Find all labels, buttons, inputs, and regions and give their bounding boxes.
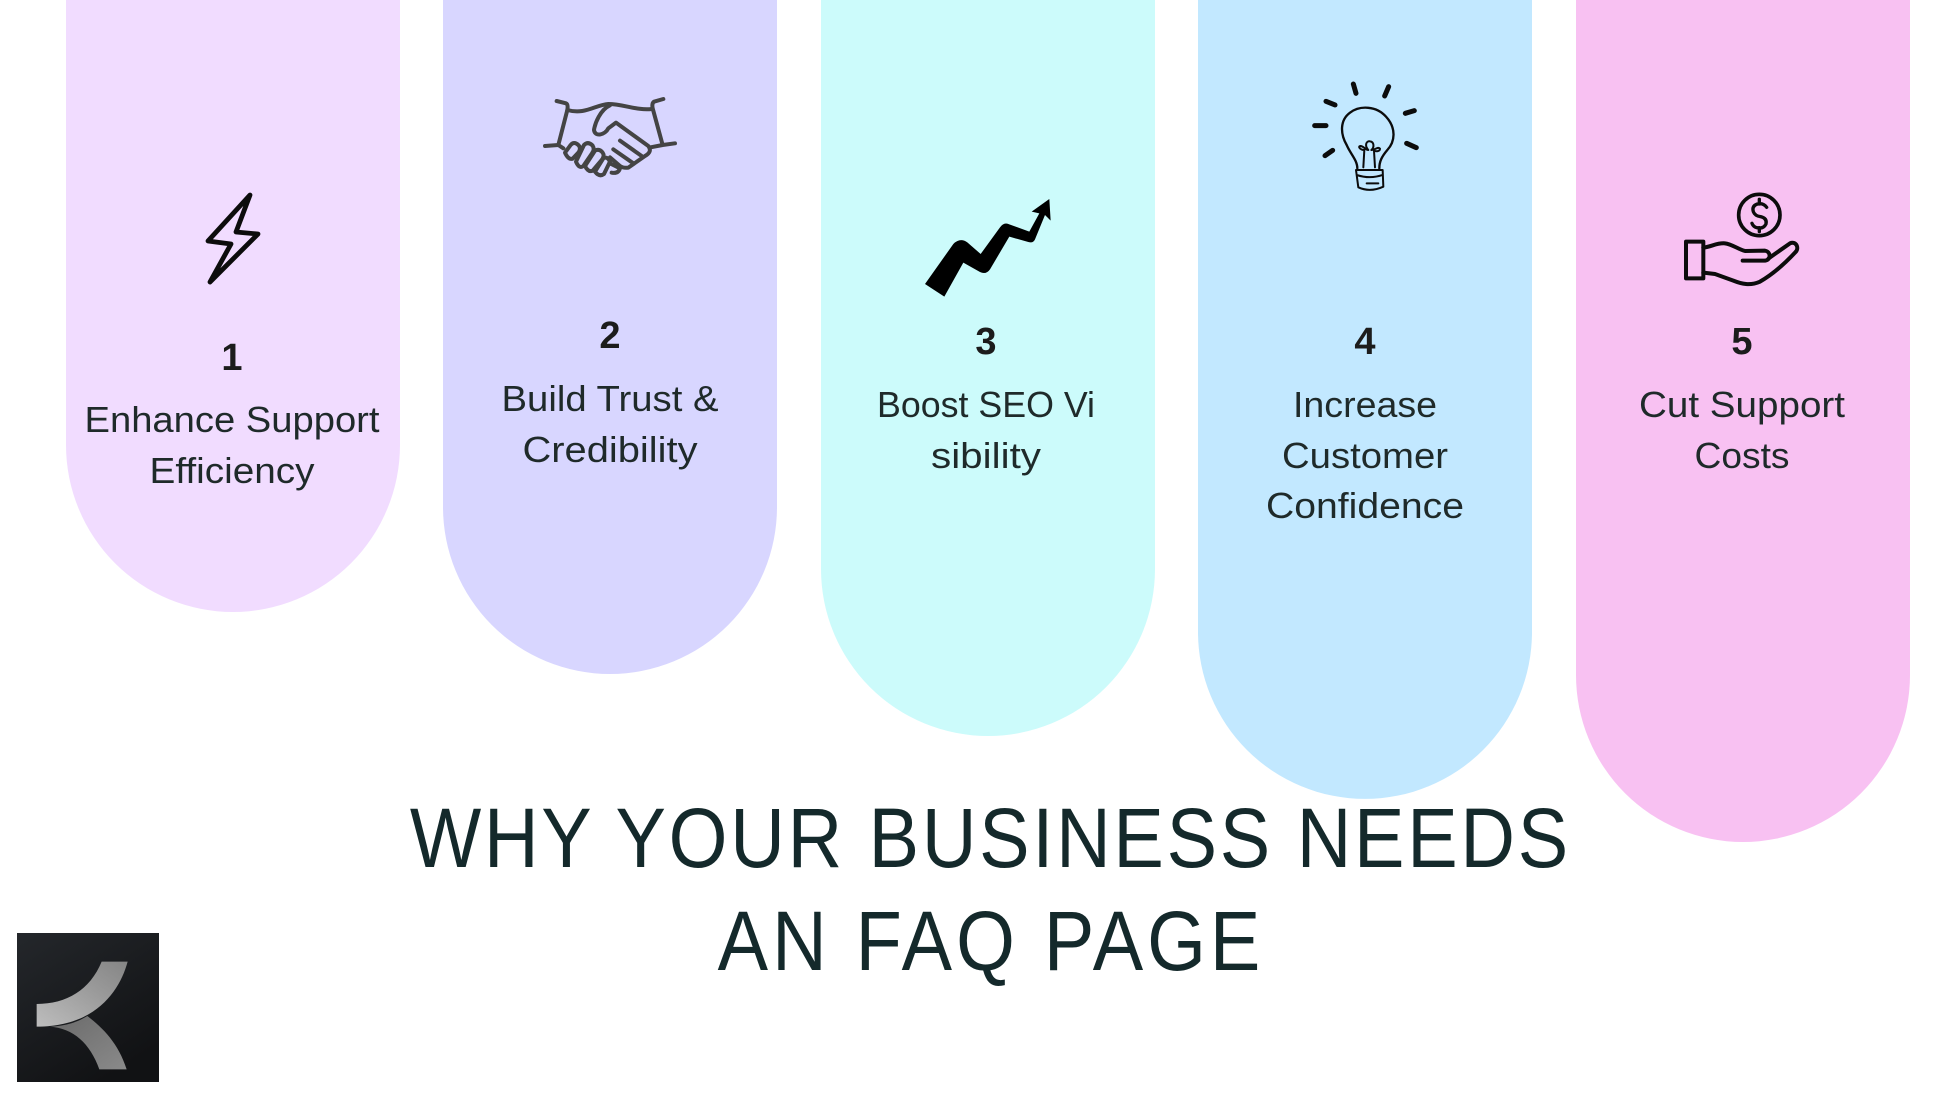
label: Cut Support Costs: Cut Support (1639, 384, 1845, 425)
panel: step 4 Increase Customer Confidence (1198, 0, 1532, 799)
label: Boost SEO Visibility: Boost SEO Vi (877, 384, 1095, 425)
label: Build Trust & Credibility: Build Trust & (502, 378, 718, 419)
panel: step 1 Enhance Support Efficiency (66, 0, 400, 612)
logo (17, 933, 159, 1082)
label: Increase Customer Confidence: Increase (1293, 384, 1437, 425)
panel: step 2 Build Trust & Credibility (443, 0, 777, 674)
title (410, 791, 1568, 988)
label: Cut Support Costs: Costs (1694, 435, 1790, 476)
number 1: 1 (221, 337, 243, 379)
label: Enhance Support Efficiency (84, 399, 380, 491)
label: Cut Support Costs (1639, 384, 1845, 476)
icon: handshake (545, 99, 675, 175)
label: Increase Customer Confidence (1266, 384, 1464, 526)
label: Increase Customer Confidence: Customer (1282, 435, 1448, 476)
icon: light bulb (1315, 84, 1416, 190)
number 3: 3 (975, 321, 997, 363)
icon: hand with coin (1686, 194, 1797, 284)
label: Boost SEO Visibility (877, 384, 1095, 476)
panel: step 3 Boost SEO Visibility (821, 0, 1155, 736)
label: Increase Customer Confidence: Confidence (1266, 485, 1464, 526)
panel: step 5 Cut Support Costs (1576, 0, 1910, 842)
title: AN FAQ PAGE (718, 894, 1260, 988)
label: Build Trust & Credibility (502, 378, 718, 470)
icon: rising arrow (925, 199, 1051, 297)
label: Boost SEO Visibility: sibility (931, 435, 1041, 476)
number 2: 2 (599, 315, 621, 357)
number 4: 4 (1354, 321, 1376, 363)
number 5: 5 (1731, 321, 1753, 363)
title: WHY YOUR BUSINESS NEEDS (410, 791, 1568, 885)
label: Build Trust & Credibility: Credibility (522, 429, 698, 470)
label: Enhance Support Efficiency: Efficiency (150, 450, 314, 491)
label: Enhance Support Efficiency: Enhance Support (84, 399, 380, 440)
icon: lightning bolt (208, 195, 258, 282)
